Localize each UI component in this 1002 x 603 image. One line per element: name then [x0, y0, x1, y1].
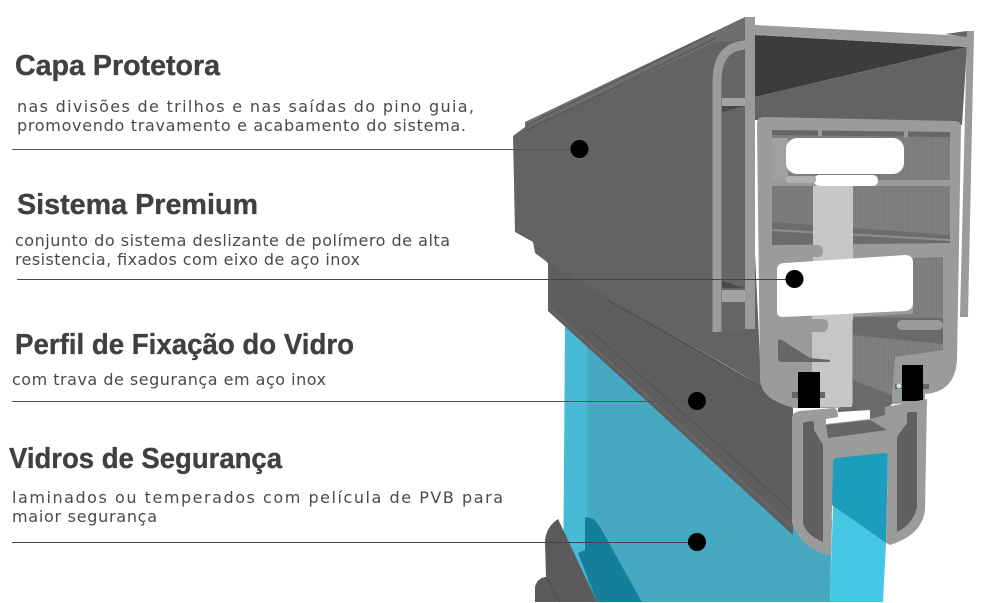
label: capa protetora: nas divisões de trilhos e nas saídas do pino guia, — [17, 97, 474, 116]
label: capa protetora — [12, 50, 588, 158]
label: vidros de seguranca — [9, 443, 706, 551]
label: capa protetora: Capa Protetora — [15, 50, 221, 82]
glass panel — [563, 325, 888, 602]
label: sistema premium: Sistema Premium — [17, 189, 258, 221]
U profile section — [792, 399, 927, 555]
lower left chamber — [778, 339, 830, 362]
label: perfil de fixacao do vidro: Perfil de Fixação do Vidro — [15, 329, 354, 361]
protective cap — [513, 17, 793, 405]
label: perfil de fixacao do vidro — [12, 329, 706, 410]
inner sliding frame — [757, 117, 961, 420]
divider arms — [772, 245, 823, 257]
label: capa protetora: promovendo travamento e acabamento do sistema. — [17, 116, 466, 135]
label: sistema premium — [15, 189, 804, 288]
black locking blocks — [792, 392, 825, 398]
lower right chamber — [913, 257, 943, 320]
label: sistema premium: resistencia, fixados com eixo de aço inox — [15, 250, 360, 269]
white cutouts — [786, 138, 904, 174]
label: vidros de seguranca: Vidros de Segurança — [9, 443, 283, 475]
label: perfil de fixacao do vidro: com trava de segurança em aço inox — [12, 370, 326, 389]
threaded rod — [813, 186, 853, 320]
label: vidros de seguranca: maior segurança — [12, 507, 157, 526]
upper chamber — [772, 130, 950, 245]
label: sistema premium: conjunto do sistema deslizante de polímero de alta — [15, 231, 450, 250]
cap end section — [717, 17, 755, 332]
label: vidros de seguranca: laminados ou temperados com película de PVB para — [12, 488, 503, 507]
lower glass fixing profile body — [535, 250, 793, 535]
rail interior — [755, 25, 974, 317]
bottom gasket — [535, 517, 642, 602]
